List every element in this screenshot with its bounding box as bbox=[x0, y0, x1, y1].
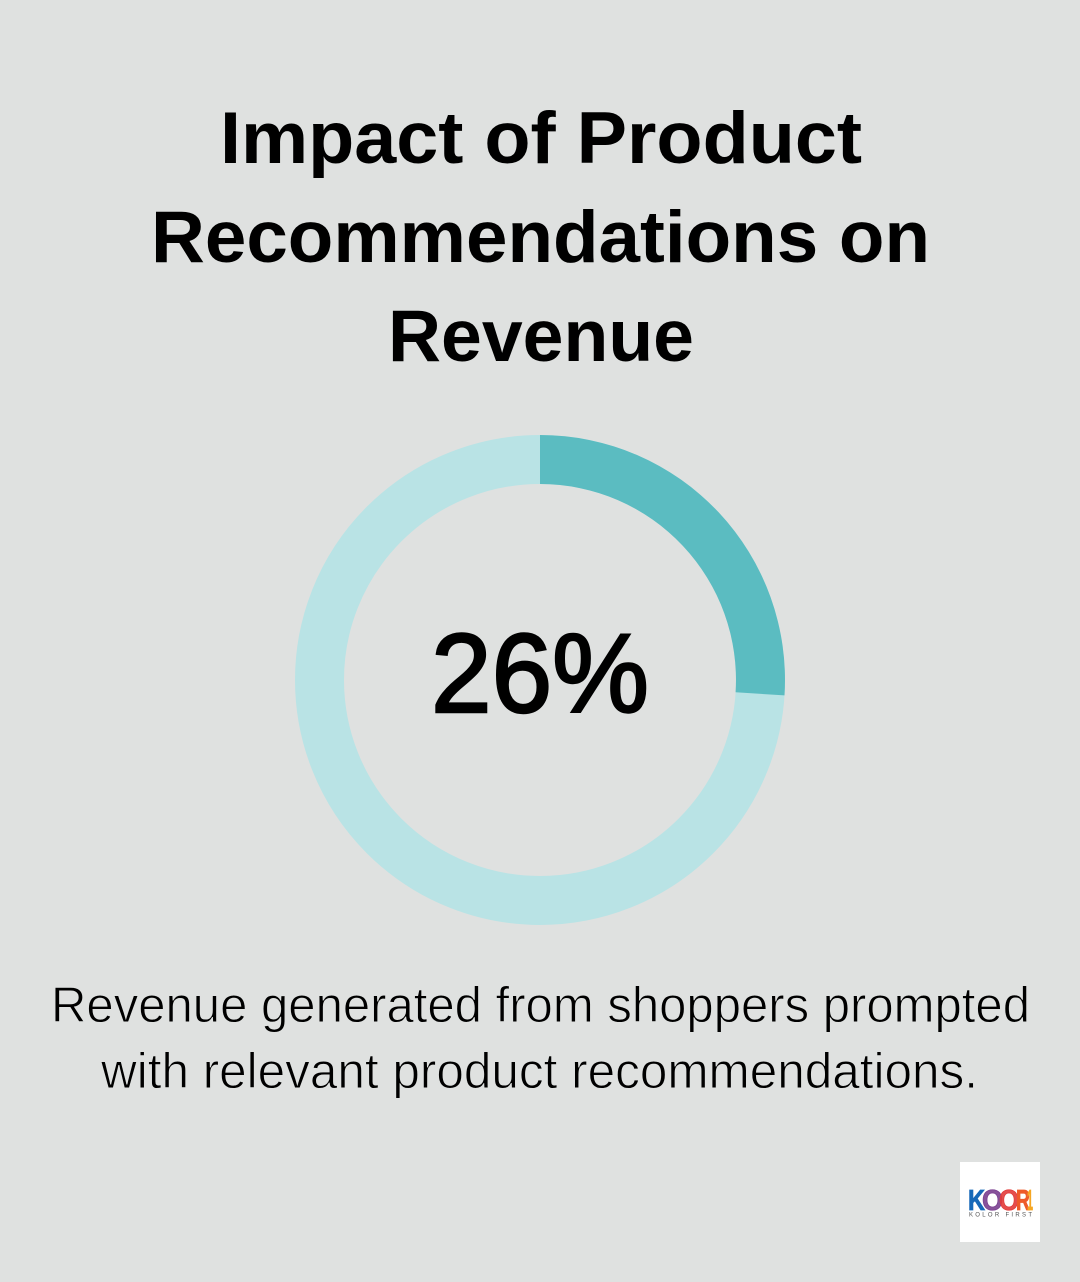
title: Impact of Product bbox=[220, 98, 862, 179]
description text: Revenue generated from shoppers prompted bbox=[51, 977, 1030, 1033]
description text: with relevant product recommendations. bbox=[100, 1043, 978, 1099]
donut segment: 26% highlighted bbox=[540, 435, 785, 695]
logo wordmark: O bbox=[982, 1185, 1003, 1217]
logo wordmark: R bbox=[1016, 1185, 1030, 1217]
logo: Koori Kolor First: 1 bbox=[1027, 1185, 1033, 1217]
description text bbox=[51, 977, 1030, 1099]
title: Revenue bbox=[388, 296, 694, 377]
logo: Koori Kolor First bbox=[960, 1162, 1040, 1242]
logo wordmark: K bbox=[968, 1185, 985, 1217]
donut chart: 26% bbox=[320, 435, 785, 900]
title bbox=[151, 98, 930, 377]
center value: 26% bbox=[431, 611, 649, 736]
logo tagline: KOLOR FIRST bbox=[969, 1212, 1032, 1218]
logo wordmark bbox=[968, 1185, 1033, 1217]
logo wordmark: O bbox=[999, 1185, 1019, 1217]
title: Recommendations on bbox=[151, 197, 930, 278]
